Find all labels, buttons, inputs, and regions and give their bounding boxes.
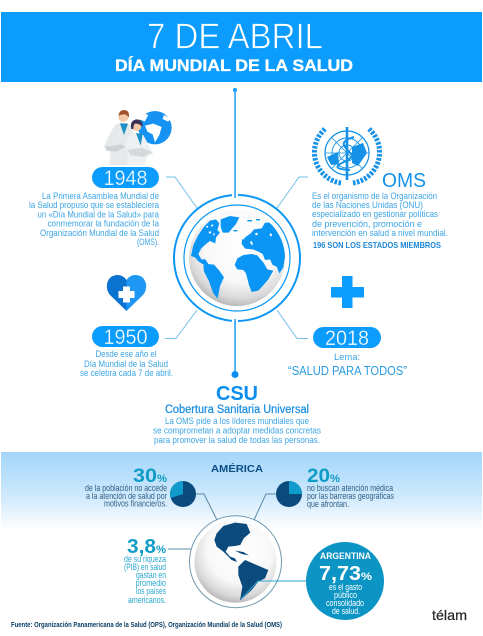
stat: 3,8 percent: % xyxy=(156,544,166,556)
callout: Argentina: consolidado xyxy=(326,598,364,608)
stat: 3,8 percent: promedio xyxy=(136,578,166,588)
panel: América background xyxy=(1,452,482,530)
section: CSU: La OMS pide a los líderes mundiales que xyxy=(165,415,309,426)
icon: heart with cross xyxy=(107,275,146,311)
callout: Argentina: % xyxy=(361,571,372,583)
stat: 30 percent: % xyxy=(157,473,167,485)
text: OMS: Es el organismo de la Organización xyxy=(312,190,437,201)
icon: plus cross xyxy=(331,276,364,308)
stat: 3,8 percent xyxy=(124,536,167,605)
text: OMS: 196 SON LOS ESTADOS MIEMBROS xyxy=(313,240,441,250)
pill: 1950 xyxy=(92,326,159,349)
subtitle: DÍA MUNDIAL DE LA SALUD xyxy=(115,56,353,75)
stat: 20 percent: % xyxy=(330,473,340,485)
stat: 20 percent: por las barreras geográficas xyxy=(307,491,394,501)
stat: 30 percent: a la atención de salud por xyxy=(86,491,167,501)
icon: doctors with globe xyxy=(104,110,172,165)
text: 1950: Día Mundial de la Salud xyxy=(84,358,168,369)
stat: 3,8 percent: americanos. xyxy=(128,595,166,605)
icon: WHO emblem xyxy=(314,127,380,183)
title: 7 DE ABRIL xyxy=(147,16,323,56)
pie chart: 30 percent xyxy=(170,481,196,507)
text: 1948: conmemorar la fundación de la xyxy=(48,218,160,228)
text: OMS: de las Naciones Unidas (ONU) xyxy=(312,199,423,210)
section: CSU: CSU xyxy=(216,383,258,405)
text: 1950 xyxy=(80,348,173,378)
pill: 1948: 1948 xyxy=(104,167,148,190)
text: 2018 lema xyxy=(288,351,407,378)
section: CSU: se comprometan a adoptar medidas concretas xyxy=(153,424,321,436)
section: CSU: Cobertura Sanitaria Universal xyxy=(165,404,309,416)
stat: 20 percent: que afrontan. xyxy=(307,499,349,509)
text: OMS: de prevención, promoción e xyxy=(312,218,422,229)
source note: Fuente: Organización Panamericana de la Salud (OPS), Organización Mundial de la Salud (OMS) xyxy=(11,620,282,629)
text: 1948: La Primera Asamblea Mundial de xyxy=(42,190,159,201)
callout: Argentina: público xyxy=(334,590,357,600)
section: CSU xyxy=(153,383,321,445)
callout: Argentina xyxy=(241,542,384,620)
callout: Argentina: es el gasto xyxy=(329,582,362,592)
header banner xyxy=(1,12,482,82)
pill: 1950: 1950 xyxy=(104,326,148,349)
stat: 30 percent: de la población no accede xyxy=(85,483,167,493)
stat: 30 percent xyxy=(85,465,167,508)
stat: 3,8 percent: 3,8 xyxy=(127,536,156,558)
stat: 30 percent: 30 xyxy=(133,465,157,487)
section: CSU: para promover la salud de todas las personas. xyxy=(154,434,320,445)
stat: 20 percent xyxy=(307,465,394,509)
text: 1948 xyxy=(29,190,160,247)
stat: 20 percent: no buscan atención médica xyxy=(307,483,394,493)
text: 2018 lema: “SALUD PARA TODOS” xyxy=(288,364,407,378)
stat: 3,8 percent: los países xyxy=(136,586,166,596)
heading: OMS: OMS xyxy=(382,170,426,192)
stat: 3,8 percent: gastan en xyxy=(136,570,166,580)
stat: 30 percent: motivos financieros. xyxy=(104,498,167,508)
woman xyxy=(125,119,153,165)
pill: 2018: 2018 xyxy=(325,327,369,350)
pill: 2018 xyxy=(313,327,381,350)
text: 1950: se celebra cada 7 de abril. xyxy=(80,367,173,378)
pill: 1948 xyxy=(92,167,159,190)
pie chart: 20 percent xyxy=(276,481,302,507)
man xyxy=(104,110,133,165)
América globe xyxy=(190,516,282,608)
text: 1948: (OMS). xyxy=(137,236,159,247)
text: 1948: la Salud propuso que se estableciera xyxy=(29,199,160,210)
logo: télam: télam xyxy=(432,607,467,623)
text: 2018 lema: Lema: xyxy=(334,351,360,362)
stat: 3,8 percent: de su riqueza xyxy=(124,554,167,564)
text: 1948: Organización Mundial de la Salud xyxy=(40,227,159,238)
stat: 3,8 percent: (PIB) en salud xyxy=(124,562,166,572)
text: OMS xyxy=(312,190,448,250)
central timeline and leader lines xyxy=(165,88,308,378)
heading: América: AMÉRICA xyxy=(211,462,263,475)
central globe with rings xyxy=(174,193,300,324)
callout: Argentina: 7,73 xyxy=(319,563,361,585)
callout: Argentina: ARGENTINA xyxy=(320,551,371,562)
text: 1950: Desde ese año el xyxy=(96,348,156,359)
connector lines xyxy=(168,494,276,549)
text: OMS: especializado en gestionar políticas xyxy=(312,208,438,219)
text: OMS: intervención en salud a nivel mundial. xyxy=(312,227,448,238)
text: 1948: un «Día Mundial de la Salud» para xyxy=(38,208,160,220)
callout: Argentina: de salud. xyxy=(332,606,360,616)
stat: 20 percent: 20 xyxy=(307,465,330,487)
